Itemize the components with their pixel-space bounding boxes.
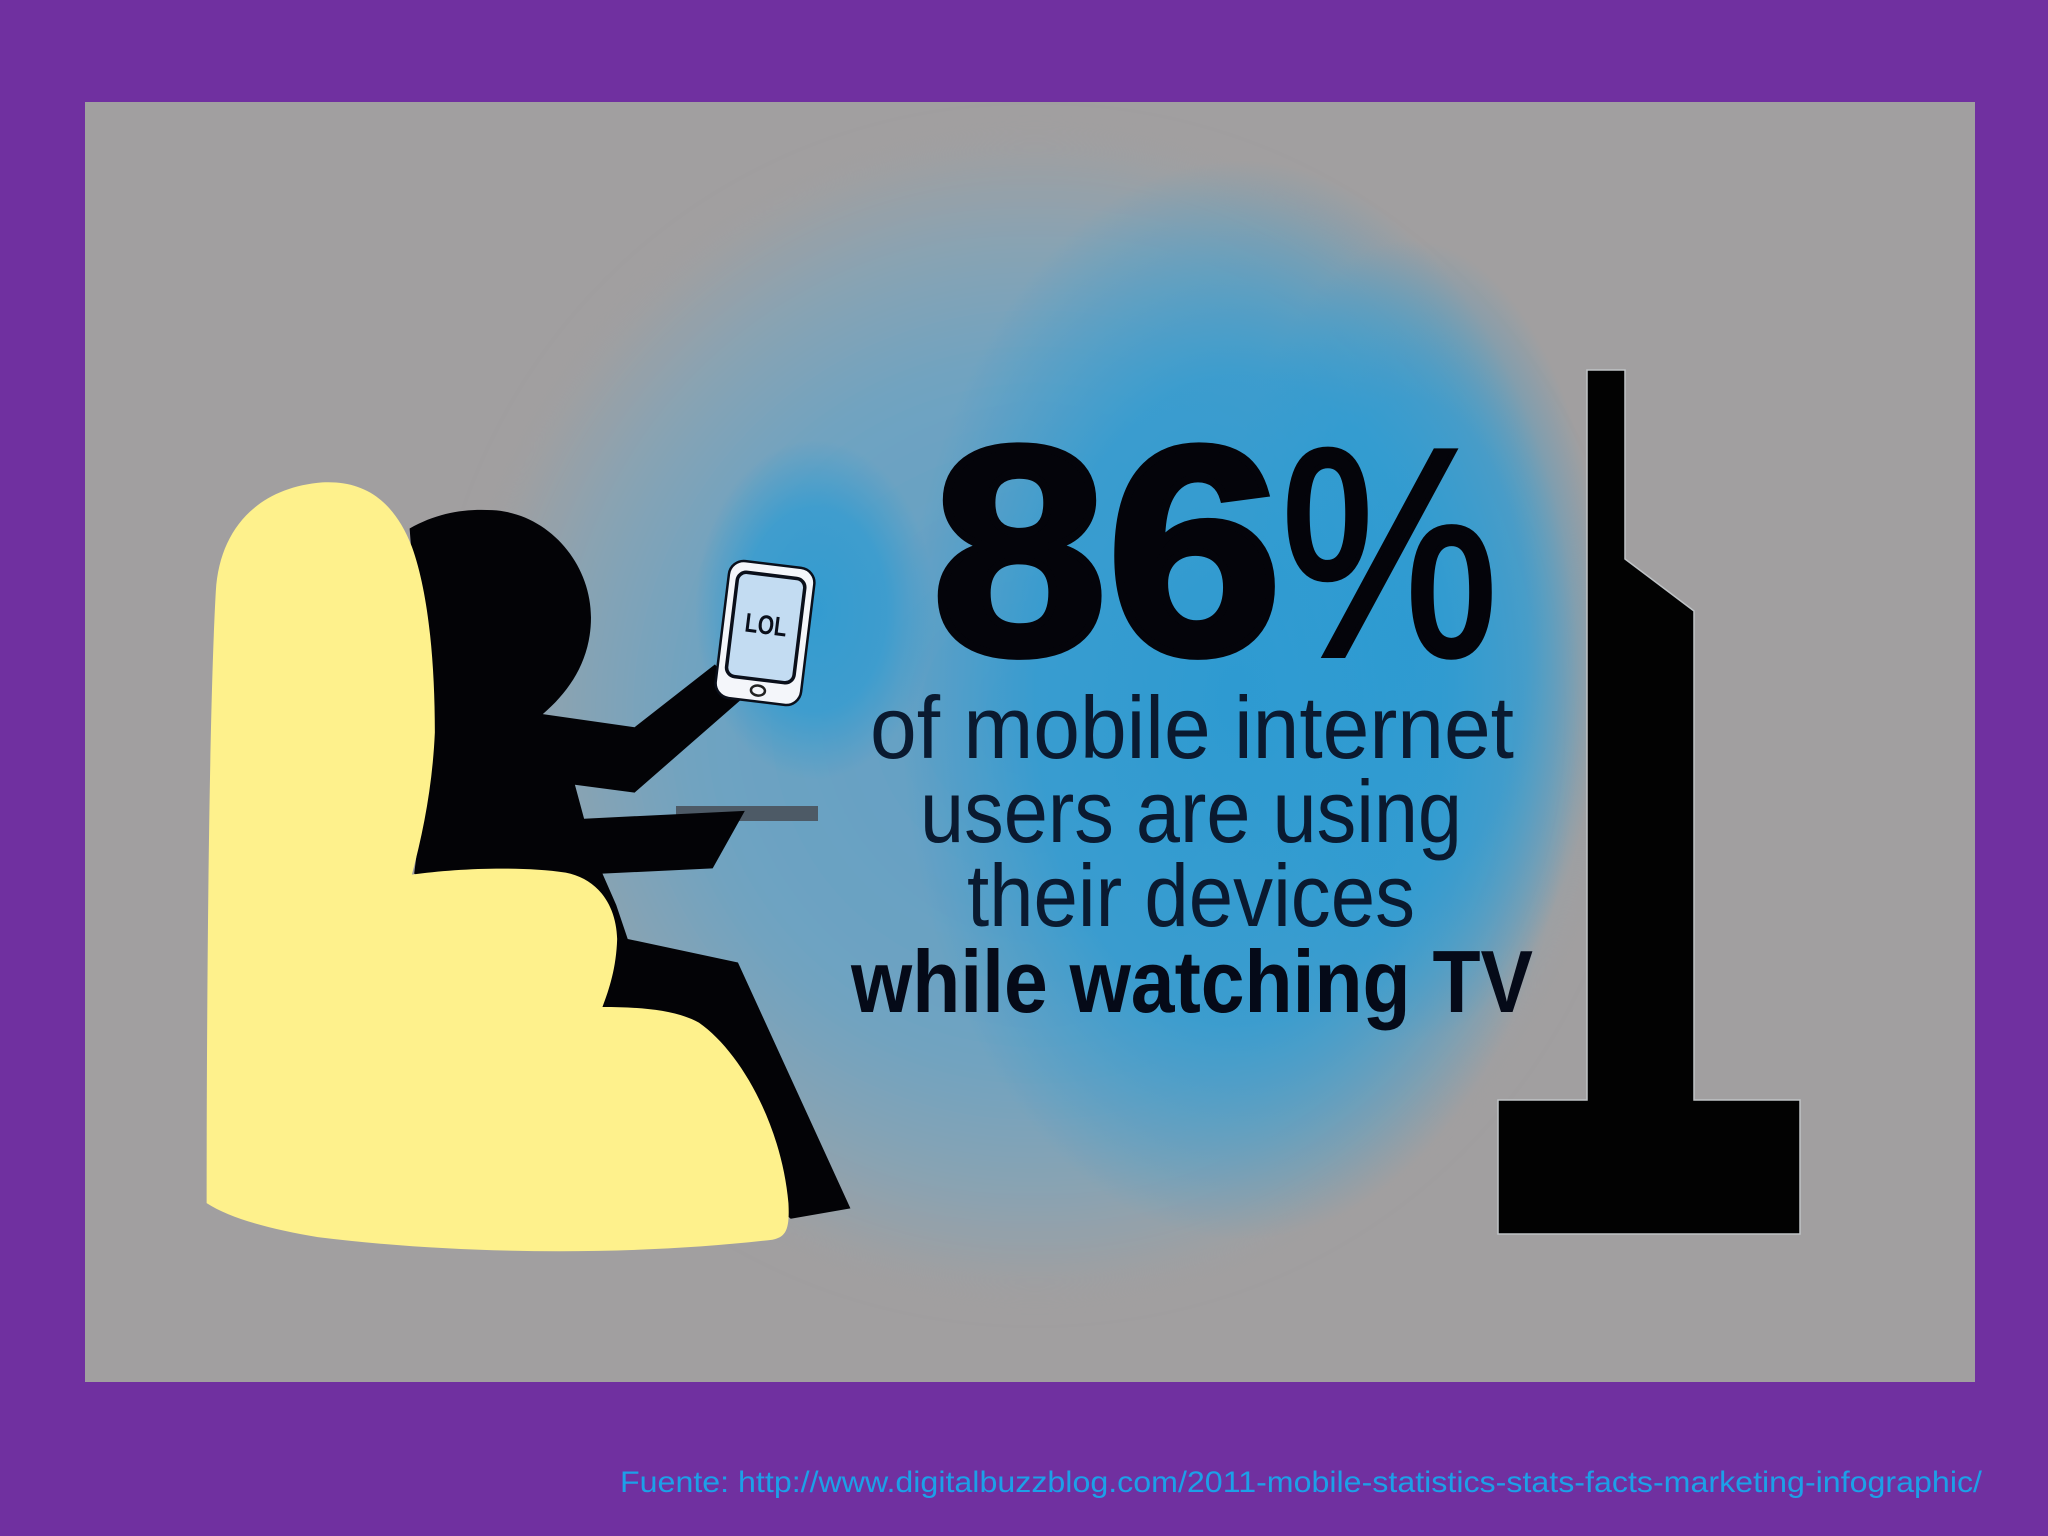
panel: grey picture background (85, 102, 1975, 1382)
text block: caption (850, 678, 1533, 1031)
text block: caption: users are using (920, 762, 1462, 861)
glow: blue TV light (536, 175, 1586, 1254)
armchair (207, 482, 789, 1251)
text block: caption: their devices (967, 846, 1415, 945)
source line: Fuente: http://www.digitalbuzzblog.com/2011-mobile-statistics-stats-facts-marketing-infographic/ (620, 1466, 1983, 1499)
person silhouette (410, 510, 850, 1219)
statistic: 86%: 86 (932, 385, 1282, 716)
table (676, 806, 818, 821)
icon: phone with LOL (714, 559, 816, 707)
text block: caption: while watching TV (850, 932, 1533, 1031)
text block: caption: of mobile internet (870, 678, 1514, 777)
icon: phone with LOL: LOL (743, 608, 789, 643)
statistic: 86%: % (1281, 387, 1498, 718)
statistic: 86% (932, 385, 1498, 718)
icon: television side view (1498, 370, 1800, 1234)
illustration: person on armchair (207, 482, 850, 1251)
